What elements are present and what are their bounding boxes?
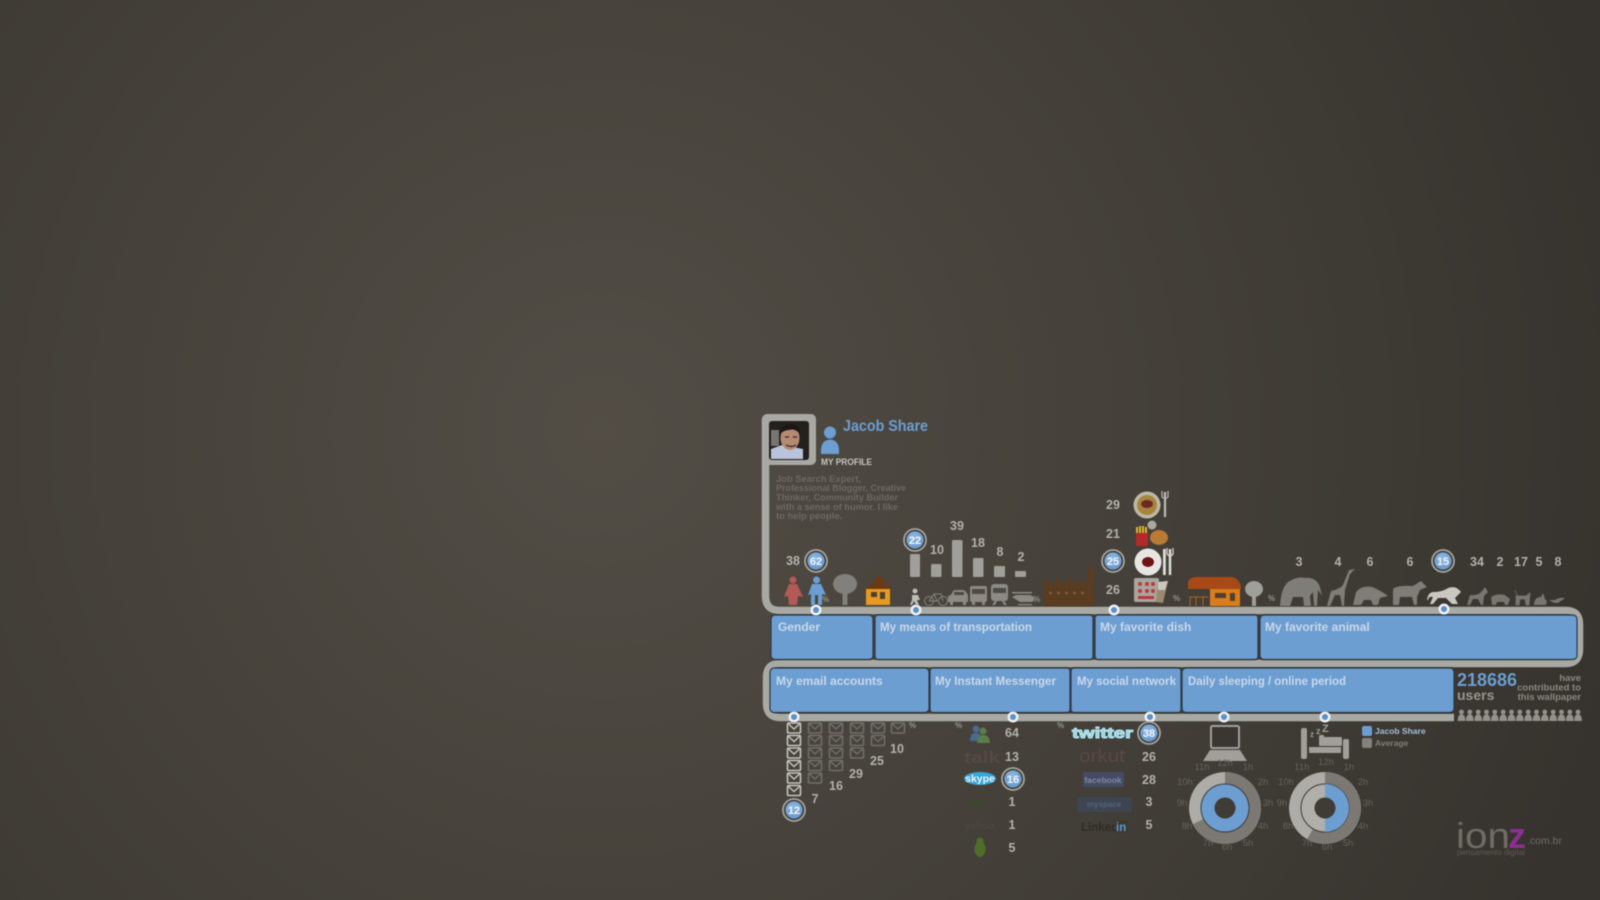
percent sign: % — [1173, 594, 1180, 603]
value: pasta: 29 — [1106, 498, 1120, 512]
panel: email accounts: My email accounts — [776, 674, 883, 688]
icon: qq penguin — [974, 838, 986, 857]
icon: person — [821, 426, 839, 454]
biography: Job Search Expert, — [776, 473, 861, 484]
icon: bus — [970, 586, 987, 605]
contribution note: have — [1559, 673, 1581, 684]
icon: rabbit — [1534, 593, 1547, 605]
icon: wolf — [1467, 587, 1488, 605]
hour labels: 12h — [1318, 757, 1334, 768]
biography: Professional Blogger, Creative — [776, 482, 906, 493]
hour labels: 9h — [1277, 798, 1287, 809]
values: 5 — [1536, 555, 1543, 569]
panel: favorite animal: My favorite animal — [1265, 620, 1370, 634]
chart: instant messenger — [955, 721, 1024, 857]
bar: train: 8 — [997, 545, 1004, 559]
values: 13 — [1005, 750, 1019, 764]
icon: tree — [833, 574, 857, 605]
badge: meat — [1102, 550, 1124, 572]
badge: lion — [1432, 550, 1454, 572]
values: 16 — [829, 779, 843, 793]
hour labels: 5h — [1343, 838, 1353, 849]
hour labels: 1h — [1344, 762, 1354, 773]
biography: Thinker, Community Builder — [776, 492, 898, 502]
hour labels: 9h — [1177, 798, 1187, 809]
panel: instant messenger — [930, 668, 1070, 712]
icon: fast food — [1136, 520, 1168, 546]
columns: other providers — [808, 723, 904, 783]
biography: with a sense of humor. I like — [775, 501, 898, 512]
hour labels: 2h — [1258, 777, 1268, 788]
badge: walking: 22 — [909, 535, 921, 547]
bar: walking — [910, 554, 920, 577]
icon: shop building — [1188, 577, 1241, 606]
values — [812, 742, 904, 806]
values: 1 — [1009, 818, 1016, 832]
logo: ionz: z — [1508, 815, 1526, 856]
values: 7 — [812, 792, 819, 806]
percent sign: % — [1033, 595, 1040, 604]
values — [1296, 555, 1562, 569]
icon: hippo — [1491, 594, 1510, 605]
values: 3 — [1296, 555, 1303, 569]
percent sign: % — [909, 721, 916, 730]
bar: car: 39 — [950, 519, 964, 533]
hour labels: 11h — [1194, 762, 1210, 773]
percent sign: % — [955, 721, 962, 730]
profile label: MY PROFILE — [821, 457, 872, 467]
icon: goat — [1515, 590, 1530, 605]
hour labels: 8h — [1182, 821, 1192, 832]
logo: ionz — [1456, 815, 1563, 857]
logo: linkedin: Linked — [1081, 822, 1118, 834]
icon: sleep letters: z — [1310, 730, 1314, 739]
values: 28 — [1142, 773, 1156, 787]
chart: social network — [1057, 721, 1160, 834]
values — [1005, 726, 1019, 855]
upper frame band — [766, 418, 1580, 718]
chart: email accounts — [783, 721, 916, 821]
icon: laptop — [1203, 726, 1247, 761]
donut: online hours — [1189, 772, 1261, 844]
logo: orkut: orkut — [1079, 746, 1125, 766]
logo: myspace: myspace — [1087, 800, 1122, 809]
hour labels: 2h — [1358, 777, 1368, 788]
chart: favorite dish — [1102, 491, 1565, 606]
chart: sleeping period — [1277, 723, 1373, 853]
values: 6 — [1407, 555, 1414, 569]
icon: train — [991, 584, 1008, 605]
contribution note: this wallpaper — [1518, 692, 1581, 703]
values: 25 — [870, 754, 884, 768]
name: Jacob Share — [843, 418, 928, 435]
values: 17 — [1514, 555, 1528, 569]
hour labels — [1277, 757, 1373, 853]
contribution note: contributed to — [1517, 682, 1581, 694]
legend: Jacob Share: Jacob Share — [1375, 726, 1426, 736]
logo: ionz: pensamento digital — [1457, 847, 1525, 857]
icon: factory — [1044, 568, 1094, 606]
percent sign: % — [1268, 594, 1275, 603]
icon row: people — [1458, 710, 1582, 721]
chart: online period — [1177, 726, 1273, 853]
chart: favorite animal — [1280, 550, 1565, 606]
badge: meat: 25 — [1107, 556, 1119, 568]
logo: ionz: ion — [1456, 815, 1510, 856]
profile photo — [769, 421, 809, 460]
hour labels: 1h — [1243, 762, 1253, 773]
panel: favorite animal — [1260, 615, 1577, 660]
value: female: 38 — [786, 554, 800, 568]
panel: favorite dish — [1095, 615, 1258, 660]
icon: giraffe — [1327, 569, 1355, 606]
logo: facebook: facebook — [1084, 775, 1122, 785]
legend — [1362, 726, 1426, 748]
values: 26 — [1142, 750, 1156, 764]
icon: msn — [970, 726, 990, 743]
badge: first provider: 12 — [788, 805, 800, 817]
values: 5 — [1146, 818, 1153, 832]
icon: helicopter — [1012, 592, 1034, 605]
values: 10 — [890, 742, 904, 756]
percent sign: % — [822, 595, 829, 604]
logo: linkedin: in — [1116, 822, 1126, 834]
panel: sleeping and online period: Daily sleeping / online period — [1188, 674, 1346, 688]
chart: gender — [784, 550, 892, 605]
bar: bus: 18 — [971, 536, 985, 550]
hour labels: 3h — [1263, 798, 1273, 809]
badge: twitter: 38 — [1143, 728, 1155, 740]
hour labels: 4h — [1258, 821, 1268, 832]
icon: bicycle — [924, 594, 948, 606]
bar: plane: 2 — [1018, 550, 1025, 564]
logo: twitter: twitter — [1072, 725, 1133, 742]
icon: pasta plate — [1134, 491, 1168, 518]
values: 64 — [1005, 726, 1019, 740]
hour labels: 4h — [1358, 821, 1368, 832]
biography: to help people. — [776, 510, 842, 521]
panel: means of transportation — [875, 615, 1093, 660]
values: 2 — [1497, 555, 1504, 569]
badge: lion: 15 — [1437, 556, 1449, 568]
icon: yahoo: yahoo — [965, 821, 994, 832]
icon: male figure — [808, 576, 826, 605]
panel: category bars — [770, 615, 1577, 712]
icon: sushi tray — [1134, 578, 1168, 603]
icon: sleep letters — [1310, 723, 1329, 739]
icon: skype: skype — [965, 773, 995, 785]
logo: ionz: .com.br — [1527, 835, 1563, 847]
value: sushi: 26 — [1106, 583, 1120, 597]
panel: gender — [771, 615, 873, 660]
values: 5 — [1009, 841, 1016, 855]
hour labels: 11h — [1294, 762, 1310, 773]
icon: female figure — [784, 576, 803, 605]
infographic frame — [762, 414, 1580, 718]
panel: sleeping and online period — [1182, 668, 1454, 712]
icon: meat plate — [1134, 548, 1173, 576]
icon: small tree — [1245, 581, 1263, 606]
panel: instant messenger: My Instant Messenger — [935, 674, 1056, 688]
panel: social network — [1071, 668, 1181, 712]
icon: bear — [1353, 587, 1388, 605]
panel: means of transportation: My means of transportation — [880, 620, 1032, 634]
chart: transportation bars — [904, 519, 1040, 606]
values — [1142, 750, 1156, 832]
icon: elephant — [1280, 578, 1322, 606]
column: first provider — [788, 723, 800, 796]
icon: bed — [1301, 728, 1349, 759]
number of users: 218686 — [1457, 669, 1517, 690]
bar: bicycle: 10 — [930, 543, 944, 557]
icon: gtalk: talk — [964, 748, 1001, 767]
icon: walker — [910, 588, 920, 605]
panel: social network: My social network — [1077, 674, 1176, 688]
icon: icq: icq — [968, 797, 984, 809]
panel: favorite dish: My favorite dish — [1100, 620, 1191, 634]
panel: gender: Gender — [778, 620, 820, 634]
values: 6 — [1367, 555, 1374, 569]
hour labels — [1177, 758, 1273, 853]
icon: car — [948, 590, 968, 605]
hour labels: 8h — [1283, 821, 1293, 832]
hour labels: 10h — [1177, 777, 1193, 788]
values: 29 — [849, 767, 863, 781]
hour labels: 7h — [1203, 838, 1213, 849]
hour labels: 6h — [1322, 842, 1332, 853]
icon: sleep letters: z — [1316, 726, 1321, 736]
percent sign: % — [1057, 721, 1064, 730]
donut: sleeping hours — [1289, 772, 1361, 844]
values: 3 — [1146, 795, 1153, 809]
contribution note — [1517, 673, 1581, 703]
contributor count — [1457, 669, 1582, 721]
hour labels: 12h — [1217, 758, 1233, 769]
hour labels: 3h — [1363, 798, 1373, 809]
legend: Average: Average — [1375, 738, 1409, 748]
values: 8 — [1555, 555, 1562, 569]
values: 34 — [1470, 555, 1484, 569]
panel: email accounts — [770, 668, 929, 712]
hour labels: 6h — [1222, 842, 1232, 853]
biography — [775, 473, 906, 521]
icon: horse — [1393, 581, 1427, 605]
hour labels: 5h — [1243, 838, 1253, 849]
hour labels: 10h — [1278, 777, 1294, 788]
values: 1 — [1009, 795, 1016, 809]
values: 4 — [1335, 555, 1342, 569]
badge: skype: 16 — [1007, 774, 1019, 786]
icon: house — [864, 574, 892, 605]
value: fast food: 21 — [1106, 527, 1120, 541]
badge: male: 62 — [810, 556, 822, 568]
photo frame — [762, 414, 816, 465]
users label: users — [1457, 687, 1495, 703]
icon: lion — [1427, 587, 1461, 604]
panel: profile — [769, 418, 928, 521]
icon: bird — [1549, 598, 1565, 603]
connector dots — [788, 604, 1450, 722]
hour labels: 7h — [1302, 838, 1312, 849]
icon: sleep letters: Z — [1322, 723, 1329, 735]
